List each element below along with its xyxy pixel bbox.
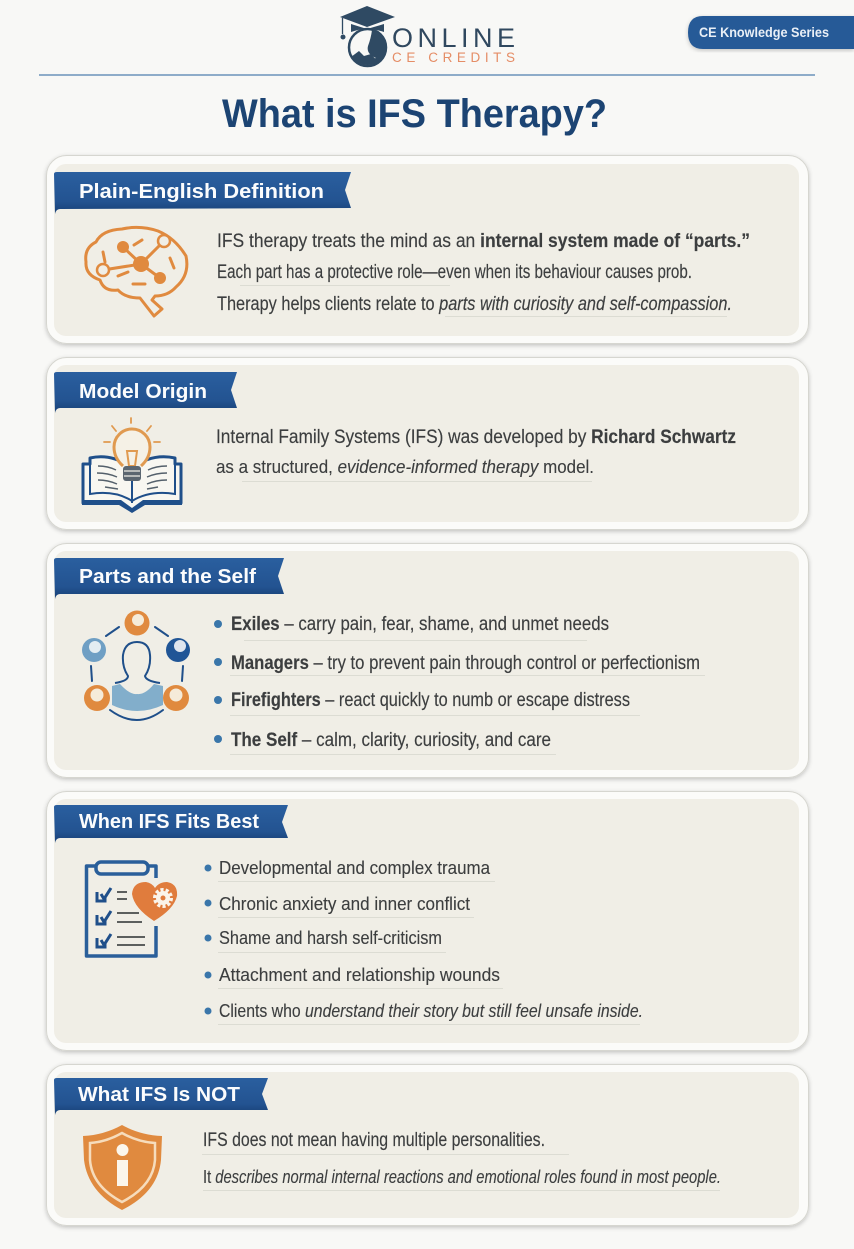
icon: graduation cap and globe xyxy=(340,6,395,66)
icon: book and light bulb xyxy=(82,418,182,513)
origin text xyxy=(216,427,736,482)
not-list text: It describes normal internal reactions and emotional roles found in most people. xyxy=(203,1167,721,1187)
logo subline: CE CREDITS xyxy=(392,50,515,65)
title: What is IFS Therapy? xyxy=(222,92,607,136)
fit list xyxy=(204,858,643,1024)
panel: What IFS Is NOT xyxy=(46,1064,808,1226)
parts list: Exiles – carry pain, fear, shame, and unmet needs xyxy=(231,614,609,635)
heading ribbon xyxy=(54,805,288,843)
logo wordmark: ONLINE xyxy=(392,23,515,53)
definition text: IFS therapy treats the mind as an internal system made of “parts.” xyxy=(217,231,750,252)
parts list: Managers – try to prevent pain through control or perfectionism xyxy=(231,653,700,674)
heading ribbon: What IFS Is NOT xyxy=(78,1083,240,1106)
panel: Plain-English Definition xyxy=(46,156,808,344)
icon: shield with info mark xyxy=(83,1125,162,1210)
definition text: Therapy helps clients relate to parts with curiosity and self-compassion. xyxy=(217,294,732,315)
parts list: The Self – calm, clarity, curiosity, and care xyxy=(231,730,551,751)
fit list: Clients who understand their story but still feel unsafe inside. xyxy=(219,1001,643,1021)
icon: clipboard with heart xyxy=(86,862,177,956)
not-list text xyxy=(202,1130,721,1190)
badge: CE Knowledge Series xyxy=(688,16,854,49)
fit list: Developmental and complex trauma xyxy=(219,858,491,878)
panel: Model Origin xyxy=(46,358,808,530)
origin text: as a structured, evidence-informed therapy model. xyxy=(216,457,594,477)
heading ribbon xyxy=(54,372,237,413)
icon: parts around a person xyxy=(82,610,190,720)
heading ribbon xyxy=(54,172,351,214)
parts list: Firefighters – react quickly to numb or escape distress xyxy=(231,690,630,711)
logo: Online CE Credits xyxy=(340,6,515,66)
heading ribbon: Parts and the Self xyxy=(79,565,256,588)
fit list: Attachment and relationship wounds xyxy=(219,965,500,985)
definition text xyxy=(217,231,750,316)
panel: Parts and the Self xyxy=(46,544,808,778)
fit list: Shame and harsh self-criticism xyxy=(219,928,442,948)
not-list text: IFS does not mean having multiple personalities. xyxy=(203,1130,545,1151)
heading ribbon xyxy=(54,1078,268,1115)
heading ribbon: Model Origin xyxy=(79,380,207,403)
panel: When IFS Fits Best xyxy=(46,792,808,1050)
heading ribbon: Plain-English Definition xyxy=(79,180,324,203)
parts list xyxy=(214,614,705,754)
origin text: Internal Family Systems (IFS) was developed by Richard Schwartz xyxy=(216,427,736,448)
definition text: Each part has a protective role—even when its behaviour causes prob. xyxy=(217,262,692,283)
heading ribbon xyxy=(54,558,284,599)
heading ribbon: When IFS Fits Best xyxy=(79,810,259,833)
icon: brain network xyxy=(86,227,187,316)
badge: CE Knowledge Series: CE Knowledge Series xyxy=(699,24,829,40)
fit list: Chronic anxiety and inner conflict xyxy=(219,894,470,914)
